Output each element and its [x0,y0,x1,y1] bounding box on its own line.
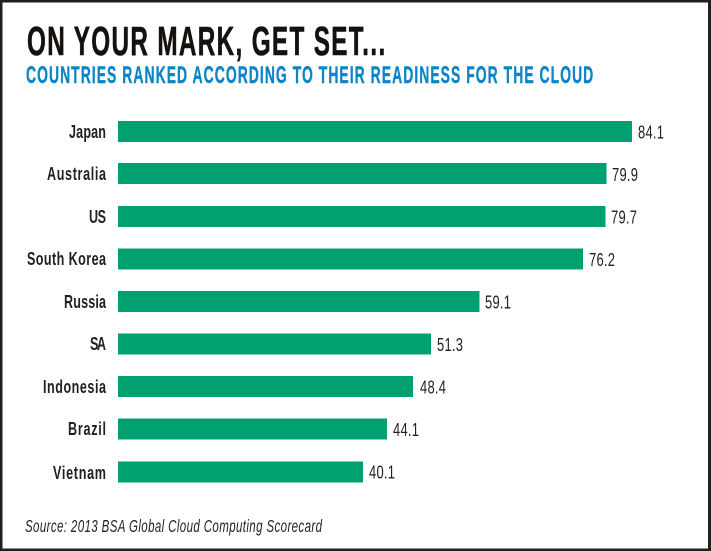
source note: Source: 2013 BSA Global Cloud Computing Scorecard [25,518,323,537]
row: Russia: Russia [64,293,106,313]
row: SA: 51.3 [437,336,463,356]
row: Japan: Japan [69,123,106,143]
row: South Korea: 76.2 [589,251,615,271]
row: South Korea: South Korea [27,250,106,270]
row: Australia: 79.9 [612,166,638,186]
row: SA: SA [90,335,106,355]
subtitle: COUNTRIES RANKED ACCORDING TO THEIR READINESS FOR THE CLOUD [26,62,593,89]
row: Indonesia: 48.4 [420,378,446,398]
row: SA [90,334,463,356]
row: Brazil: Brazil [68,420,106,440]
row: Vietnam [53,462,395,484]
bar chart [27,121,664,484]
row: Japan: 84.1 [638,123,664,143]
row: US: 79.7 [611,208,637,228]
row: South Korea [27,248,615,271]
row: Australia: Australia [47,165,106,185]
row: Australia [47,163,638,186]
row: US [89,206,637,228]
row: Indonesia: Indonesia [43,378,106,398]
row: Brazil: 44.1 [393,421,419,441]
row: Brazil [68,418,419,441]
title: ON YOUR MARK, GET SET... [27,20,385,65]
row: Indonesia [43,376,446,398]
row: US: US [89,208,106,228]
row: Vietnam: Vietnam [53,464,106,484]
row: Russia [64,291,511,313]
row: Japan [69,121,664,143]
row: Russia: 59.1 [485,293,511,313]
row: Vietnam: 40.1 [369,463,395,483]
